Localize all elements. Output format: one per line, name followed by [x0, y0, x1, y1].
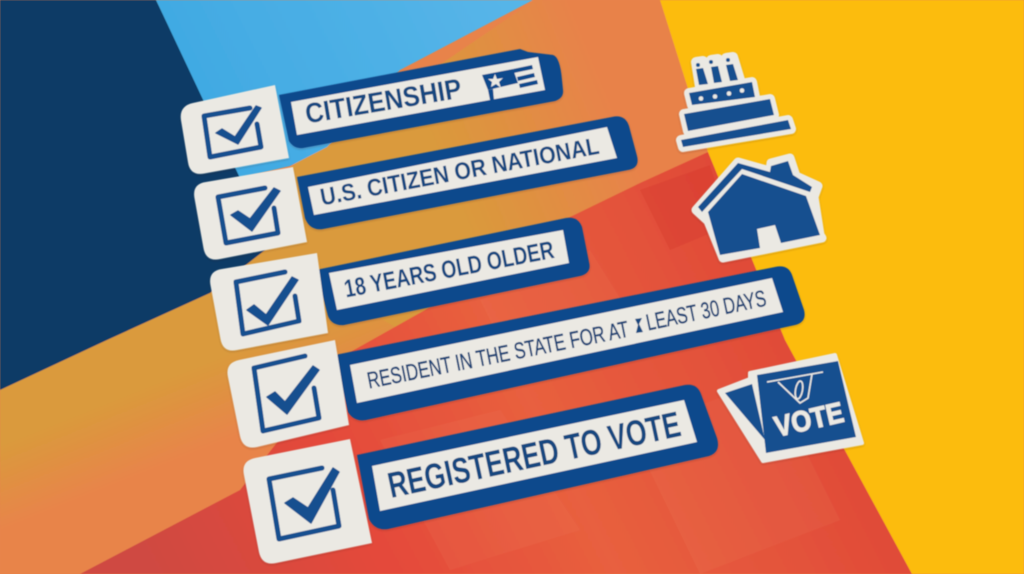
ballot label: VOTE — [771, 397, 847, 444]
row 4: resident in the state — [227, 266, 805, 448]
ribbon 2 text: U.S. CITIZEN OR NATIONAL — [318, 133, 601, 211]
paper: yellow — [660, 0, 1024, 574]
checkbox tile 5 — [243, 439, 372, 564]
paper: red — [80, 152, 912, 574]
ribbon 4 text: RESIDENT IN THE STATE FOR AT — [365, 316, 631, 393]
ribbon 4 text continued: LEAST 30 DAYS — [644, 285, 768, 335]
row 1: citizenship — [181, 49, 563, 174]
ribbon 3 text: 18 YEARS OLD OLDER — [342, 236, 556, 303]
checkbox tile 1 — [181, 85, 289, 174]
checkbox tile 2 — [194, 167, 307, 260]
icon: flag — [482, 65, 538, 100]
paper: light blue — [156, 0, 533, 178]
ribbon 5 — [357, 385, 718, 529]
icon: birthday cake — [681, 57, 791, 147]
row 2: U.S. citizen or national — [194, 116, 638, 260]
icon: ballot vote sticker — [719, 355, 862, 461]
ballot slot and paper clip mark — [767, 372, 823, 403]
icon: stray glyph — [635, 318, 643, 333]
paper: faint red patches — [380, 250, 840, 574]
paper: navy — [0, 0, 265, 390]
row 3: 18 years old older — [210, 218, 590, 351]
ribbon 3 — [316, 218, 590, 325]
checkbox tile 3 — [210, 253, 328, 351]
checkbox tile 4 — [227, 340, 349, 448]
ribbon 5 text: REGISTERED TO VOTE — [384, 403, 684, 506]
ribbon 1 text: CITIZENSHIP — [303, 73, 464, 129]
ribbon 2 — [297, 116, 638, 229]
ribbon 4 — [335, 266, 805, 420]
paper: darker red patch — [640, 165, 730, 250]
row 5: registered to vote — [243, 385, 718, 564]
icon: house — [696, 158, 822, 258]
paper: lower left orange — [0, 270, 400, 574]
ribbon 1 — [279, 49, 563, 148]
